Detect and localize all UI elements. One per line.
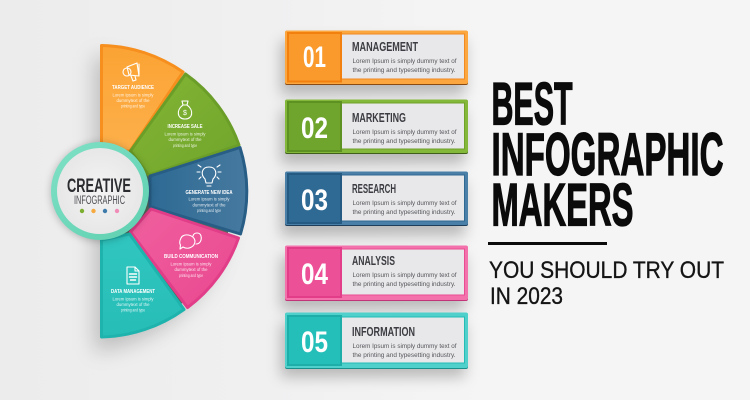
segment: target audience — [102, 46, 183, 151]
text: RESEARCH — [352, 181, 396, 196]
text: generate new idea: printing and type — [197, 208, 221, 213]
text: MANAGEMENT — [352, 39, 418, 54]
text: increase sale: printing and type — [173, 143, 197, 148]
text: data management: dummytext of the — [116, 302, 150, 307]
text — [352, 110, 457, 145]
text: data management: printing and type — [121, 308, 145, 312]
text: increase sale: Lorem Ipsum is simply — [164, 132, 206, 136]
text: increase sale: dummytext of the — [168, 137, 202, 142]
text: the printing and typesetting industry. — [352, 352, 456, 359]
icon: megaphone — [123, 63, 139, 81]
fan base — [100, 46, 234, 337]
text: Lorem Ipsum is simply dummy text of — [352, 200, 457, 207]
text: data management — [111, 289, 155, 312]
text: data management: Lorem Ipsum is simply — [112, 296, 154, 302]
text: Lorem Ipsum is simply dummy text of — [352, 58, 457, 65]
text: target audience: printing and type — [121, 104, 145, 108]
card 03: research — [281, 172, 468, 236]
text: data management: DATA MANAGEMENT — [111, 289, 155, 295]
text: the printing and typesetting industry. — [352, 138, 456, 145]
text: generate new idea — [186, 190, 232, 213]
segment: data management — [102, 234, 184, 337]
text: build communication: Lorem Ipsum is simply — [170, 262, 212, 266]
radial fan infographic — [51, 46, 247, 351]
text: target audience: Lorem Ipsum is simply — [112, 92, 154, 98]
hub dots — [80, 209, 119, 213]
text: build communication: BUILD COMMUNICATION — [164, 254, 218, 260]
icon: light bulb — [197, 165, 221, 186]
text: increase sale — [164, 124, 206, 148]
number box: 03 — [301, 184, 328, 217]
text: INFORMATION — [352, 324, 415, 339]
hub title: CREATIVE — [67, 176, 131, 197]
text: MARKETING — [352, 110, 406, 125]
text: build communication — [164, 254, 218, 278]
text: ANALYSIS — [352, 253, 395, 268]
number box: 01 — [303, 41, 326, 74]
number box — [288, 316, 341, 365]
fan shadow — [94, 56, 230, 351]
hub subtitle: INFOGRAPHIC — [74, 195, 125, 207]
text: generate new idea: dummytext of the — [192, 202, 226, 208]
text: Lorem Ipsum is simply dummy text of — [352, 343, 457, 350]
text: generate new idea: Lorem Ipsum is simply — [188, 196, 230, 202]
text — [352, 39, 457, 74]
text: the printing and typesetting industry. — [352, 209, 456, 216]
title divider — [488, 242, 607, 245]
title: BEST — [492, 70, 572, 138]
number box — [288, 33, 341, 82]
title — [492, 70, 724, 238]
text: build communication: printing and type — [179, 273, 203, 278]
icon: money bag: $ — [183, 110, 187, 117]
text: the printing and typesetting industry. — [352, 67, 456, 74]
card 01: management — [281, 30, 468, 95]
card 04: analysis — [281, 246, 468, 310]
number box — [288, 102, 341, 151]
number box: 05 — [301, 326, 328, 359]
segment: increase sale — [130, 74, 239, 175]
text: target audience: TARGET AUDIENCE — [112, 85, 154, 91]
number box: 04 — [301, 258, 328, 291]
subtitle — [489, 257, 724, 310]
number box: 02 — [301, 112, 328, 145]
center hub — [51, 143, 149, 241]
text: generate new idea: GENERATE NEW IDEA — [186, 190, 232, 196]
text: target audience: dummytext of the — [116, 98, 150, 103]
segment: generate new idea — [150, 148, 247, 234]
text: build communication: dummytext of the — [174, 267, 208, 272]
text: Lorem Ipsum is simply dummy text of — [352, 272, 457, 279]
subtitle: IN 2023 — [490, 283, 563, 310]
number box — [288, 248, 341, 297]
card 02: marketing — [281, 100, 468, 164]
text — [352, 324, 457, 359]
text: increase sale: INCREASE SALE — [168, 124, 203, 130]
icon: chat bubbles — [180, 233, 201, 249]
text — [352, 253, 457, 288]
segment: build communication — [130, 209, 238, 308]
icon: document — [127, 267, 139, 284]
title: MAKERS — [492, 172, 634, 238]
number box — [288, 174, 341, 223]
text: Lorem Ipsum is simply dummy text of — [352, 129, 457, 136]
card 05: information — [281, 312, 468, 377]
text — [352, 181, 457, 216]
text: target audience — [112, 85, 154, 108]
text: the printing and typesetting industry. — [352, 281, 456, 288]
